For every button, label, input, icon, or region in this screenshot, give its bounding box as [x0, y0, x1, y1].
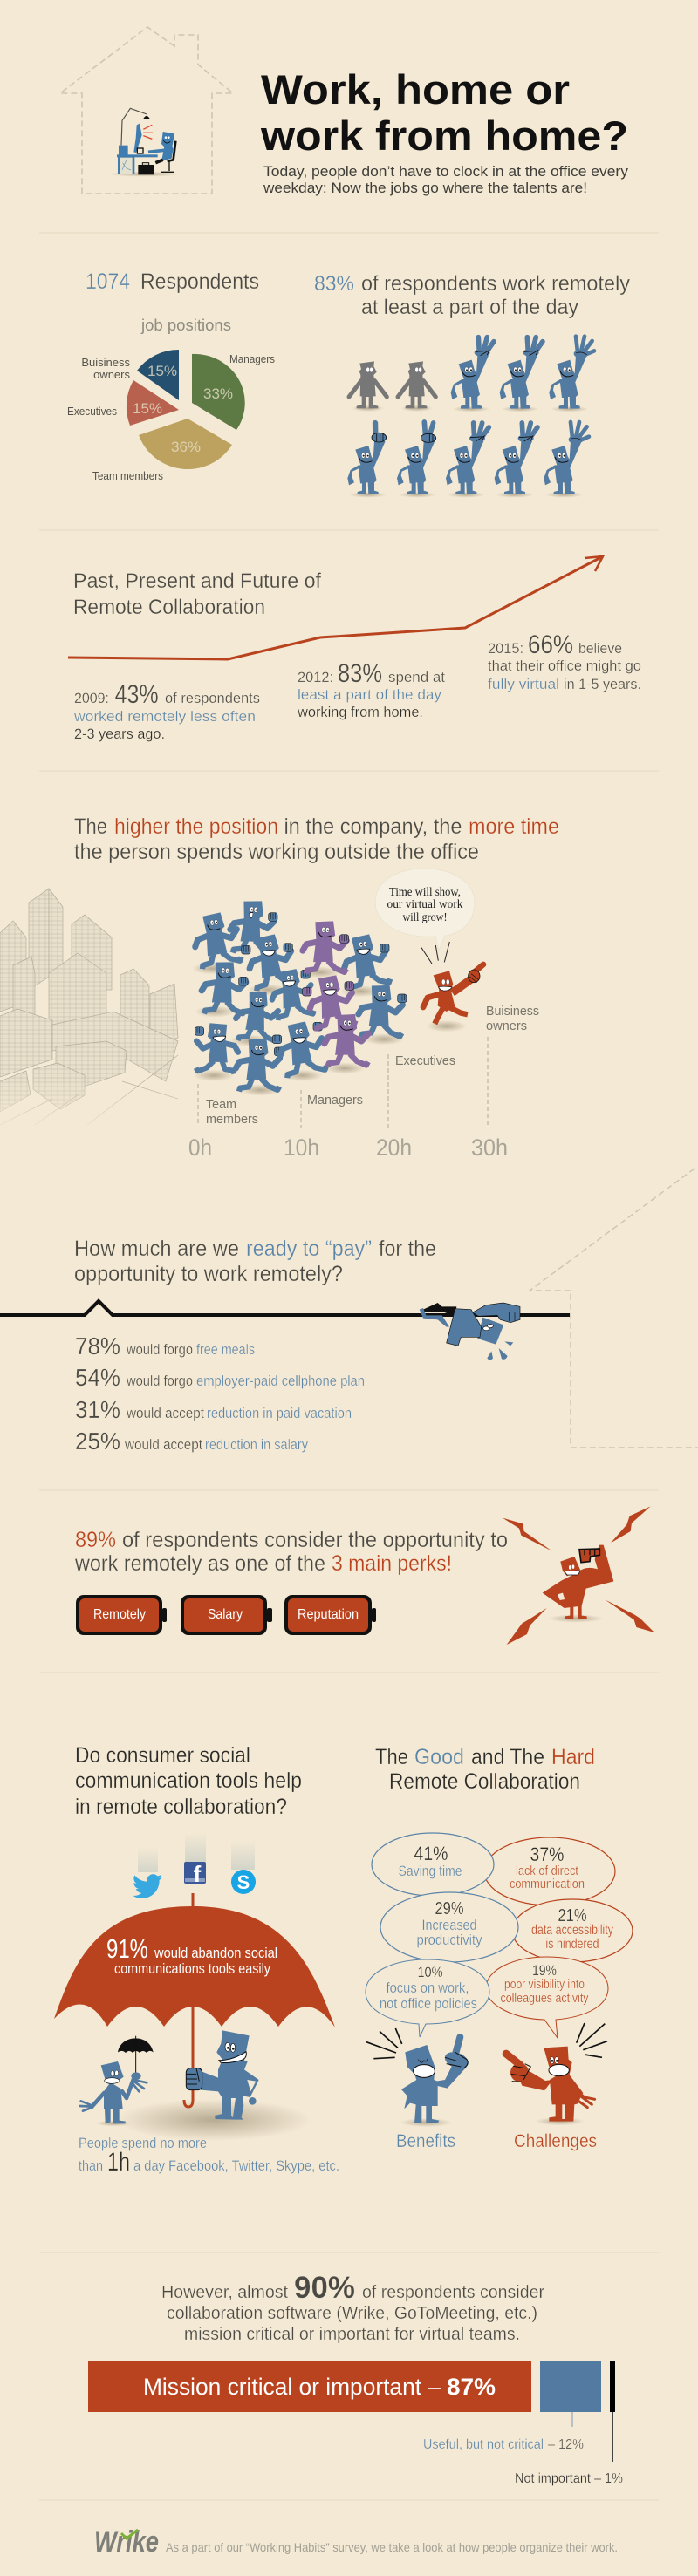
speech bubble: will grow!	[403, 910, 447, 923]
bubble: 19%	[486, 1957, 608, 2038]
good and hard heading	[375, 1745, 595, 1794]
timeline heading: Past, Present and Future of	[73, 569, 321, 593]
callout: 2012	[297, 659, 445, 720]
pay stats: would accept	[124, 1436, 202, 1453]
bubble: 41%	[372, 1833, 494, 1896]
pay heading: ready to “pay”	[246, 1237, 372, 1261]
red runner pointing	[421, 942, 483, 1024]
software paragraph: of respondents consider	[362, 2283, 544, 2302]
battery: Reputation	[284, 1595, 376, 1635]
bubble: 21%: is hindered	[546, 1937, 599, 1952]
callout: 2012: working from home.	[297, 704, 423, 720]
illustration: sketched city	[0, 889, 178, 1125]
callout: 2012: 83%	[338, 659, 382, 688]
software paragraph: 90%	[294, 2271, 355, 2305]
icon: facebook	[184, 1861, 206, 1887]
city fade	[0, 1077, 183, 1138]
umbrella: 91%	[106, 1933, 148, 1964]
battery: Reputation: Reputation	[298, 1607, 359, 1622]
social tools heading: Do consumer social	[75, 1743, 250, 1768]
software paragraph: However, almost	[161, 2283, 288, 2302]
good and hard heading: Hard	[551, 1745, 595, 1769]
labels: benefits and challenges: Benefits	[396, 2131, 455, 2151]
callout: 2009: 43%	[115, 680, 159, 709]
speech bubble: our virtual work	[387, 897, 463, 910]
usage note	[79, 2135, 339, 2177]
strong figure with lightning	[503, 1506, 654, 1645]
callout: 2015: in 1-5 years.	[564, 676, 641, 692]
title: work from home?	[260, 112, 628, 159]
stacked bar	[88, 2361, 615, 2412]
figure: benefits	[366, 2028, 470, 2127]
bubble: 10%: not office policies	[380, 1995, 477, 2012]
callout: 2015: fully virtual	[488, 676, 559, 692]
battery: Remotely	[76, 1595, 167, 1635]
position heading: more time	[469, 814, 559, 839]
callout: 2009: 2-3 years ago.	[74, 726, 165, 742]
good and hard heading: The	[375, 1745, 408, 1769]
chart labels: members	[206, 1112, 258, 1127]
good and hard heading: and The	[471, 1745, 544, 1769]
respondents heading	[86, 269, 259, 294]
chart labels: owners	[486, 1019, 527, 1033]
pie chart: job positions: 15%	[133, 400, 162, 417]
umbrella: communications tools easily	[114, 1960, 270, 1977]
social tools heading: in remote collaboration?	[75, 1795, 287, 1819]
bubble: 21%: data accessibility	[531, 1923, 613, 1938]
bubble: 41%: Saving time	[398, 1863, 462, 1879]
icon: facebook: f	[194, 1861, 202, 1887]
dividers	[39, 233, 659, 2500]
bubble: 10%: 10%	[417, 1964, 443, 1980]
perks heading: work remotely as one of the	[74, 1551, 325, 1576]
chart tick lines	[198, 1037, 488, 1128]
battery: Remotely: Remotely	[93, 1607, 146, 1622]
arrow: trend line	[68, 556, 603, 659]
pay heading: for the	[379, 1237, 436, 1261]
remote share heading: 83%	[314, 272, 354, 296]
chart labels: Executives	[395, 1053, 455, 1068]
pay heading: How much are we	[74, 1237, 239, 1261]
hours axis: 20h	[376, 1135, 412, 1161]
chart labels: Team	[206, 1097, 236, 1112]
pay stats: reduction in paid vacation	[207, 1405, 352, 1421]
remote share heading: at least a part of the day	[361, 296, 578, 319]
position heading: The	[74, 814, 107, 839]
pictogram: 10 people, 8 raising hands	[347, 337, 594, 498]
perks heading	[74, 1528, 508, 1576]
pie subtitle: job positions	[140, 317, 231, 334]
pay stats: would accept	[126, 1405, 204, 1421]
pay stats: free meals	[196, 1341, 255, 1358]
perks heading: 89%	[75, 1528, 116, 1552]
subtitle	[263, 163, 629, 196]
pie chart: job positions: 33%	[203, 385, 233, 402]
speech bubble	[375, 869, 475, 951]
callout: 2009: worked remotely less often	[73, 708, 256, 725]
title: Work, home or	[261, 66, 570, 112]
pay stats: 54%	[75, 1364, 120, 1391]
position heading	[74, 814, 559, 864]
subtitle: weekday: Now the jobs go where the talents are!	[263, 180, 587, 196]
figure hanging from bar	[420, 1303, 520, 1360]
labels: benefits and challenges: Challenges	[514, 2131, 597, 2151]
pay stats: 78%	[75, 1332, 120, 1360]
callout: 2012: 2012:	[298, 669, 333, 685]
pay stats: 25%	[75, 1428, 120, 1455]
bubble: 21%	[512, 1899, 633, 1962]
usage note: a day Facebook, Twitter, Skype, etc.	[133, 2157, 339, 2174]
stacked bar: Mission critical or important –	[143, 2374, 441, 2400]
bubble: 21%: 21%	[558, 1906, 587, 1925]
position heading: the person spends working outside the office	[74, 840, 479, 864]
remote share heading: of respondents work remotely	[361, 272, 630, 296]
bar leaders	[571, 2412, 573, 2427]
social tools heading: communication tools help	[75, 1768, 302, 1793]
callout: 2009: 2009:	[74, 690, 109, 706]
hours axis: 0h	[188, 1135, 212, 1161]
pay heading: opportunity to work remotely?	[74, 1262, 343, 1286]
bar labels: Not important – 1%	[515, 2471, 623, 2486]
perks heading: of respondents consider the opportunity to	[122, 1528, 508, 1552]
battery: Salary	[181, 1595, 272, 1635]
good and hard heading: Remote Collaboration	[389, 1769, 580, 1794]
pie labels: Managers	[229, 352, 275, 365]
bubble: 19%: poor visibility into	[504, 1977, 585, 1992]
hours axis: 30h	[471, 1135, 508, 1161]
icon trails	[138, 1833, 255, 1872]
respondents heading: 1074	[86, 269, 130, 294]
pay stats: reduction in salary	[205, 1436, 308, 1453]
software paragraph: mission critical or important for virtual teams.	[184, 2325, 520, 2344]
timeline heading: Remote Collaboration	[73, 596, 265, 619]
chart labels: Buisiness	[486, 1004, 539, 1019]
umbrella: would abandon social	[154, 1945, 277, 1961]
callout: 2012: spend at	[388, 669, 445, 685]
pay stats	[75, 1332, 365, 1455]
grey figures	[349, 361, 387, 408]
icon: person at desk	[107, 108, 181, 177]
icon: skype: S	[237, 1871, 250, 1893]
bar with bump	[0, 1301, 570, 1315]
pie labels: Executives	[67, 405, 117, 418]
bubble: 29%: productivity	[417, 1932, 482, 1948]
pay heading	[74, 1237, 436, 1286]
usage note: People spend no more	[79, 2135, 207, 2151]
bubble: 41%: 41%	[414, 1843, 448, 1864]
crowd of runners	[191, 899, 467, 1096]
pie chart: job positions	[127, 350, 245, 469]
bubble: 29%	[380, 1892, 518, 1962]
logo: Wrike: Wrike	[94, 2525, 159, 2559]
speech bubble: Time will show,	[389, 885, 461, 898]
bubble: 10%: focus on work,	[386, 1980, 469, 1996]
bubble: 19%: 19%	[532, 1962, 557, 1979]
blue figures	[347, 337, 594, 494]
pie chart: job positions: 15%	[147, 363, 177, 379]
usage note: 1h	[107, 2148, 130, 2177]
house outline	[60, 27, 233, 194]
battery: Salary: Salary	[208, 1607, 243, 1622]
good and hard heading: Good	[414, 1745, 464, 1769]
callout: 2009	[73, 680, 260, 742]
callout: 2015: 2015:	[488, 640, 524, 657]
bubble: 29%: Increased	[422, 1917, 476, 1933]
pie labels: owners	[93, 368, 130, 381]
callout: 2015: that their office might go	[488, 658, 641, 674]
position heading: higher the position	[114, 814, 278, 839]
icon: skype	[231, 1870, 256, 1894]
callout: 2009: of respondents	[165, 690, 260, 706]
stacked bar: 87%	[447, 2374, 496, 2400]
pay stats: 31%	[75, 1396, 120, 1423]
bubble: 37%: 37%	[530, 1843, 564, 1865]
hours axis	[188, 1135, 508, 1161]
callout: 2012: least a part of the day	[298, 686, 441, 703]
bar labels: Useful, but not critical	[423, 2437, 544, 2452]
software paragraph: collaboration software (Wrike, GoToMeeting, etc.)	[167, 2304, 537, 2323]
perks heading: 3 main perks!	[332, 1551, 452, 1576]
pie labels	[67, 352, 275, 482]
bubble: 19%: colleagues activity	[501, 1991, 589, 2006]
bubble: 37%: lack of direct	[516, 1864, 579, 1878]
usage note: than	[79, 2157, 103, 2174]
chart labels: Managers	[307, 1093, 363, 1107]
labels: benefits and challenges	[396, 2131, 597, 2151]
figures under umbrellas	[80, 2030, 259, 2126]
respondents heading: Respondents	[140, 269, 259, 294]
pay stats: would forgo	[126, 1341, 193, 1358]
icon: twitter	[133, 1874, 162, 1898]
pie labels: Team members	[92, 469, 163, 482]
footer tagline: As a part of our “Working Habits” survey, we take a look at how people organize their work.	[166, 2540, 618, 2554]
title	[260, 66, 628, 159]
callout: 2015: 66%	[528, 630, 573, 659]
bar labels: – 12%	[548, 2437, 584, 2452]
umbrella	[54, 1893, 335, 2141]
bubble: 10%	[366, 1959, 489, 2037]
pie labels: Buisiness	[81, 356, 130, 369]
subtitle: Today, people don’t have to clock in at the office every	[263, 163, 629, 180]
remote share heading	[314, 272, 630, 319]
callout: 2015: believe	[578, 640, 622, 657]
position heading: in the company, the	[284, 814, 462, 839]
figure: challenges	[506, 2023, 607, 2125]
second house outline	[530, 1169, 698, 1448]
bubble: 37%: communication	[510, 1877, 585, 1891]
pay stats: would forgo	[126, 1373, 193, 1389]
pie chart: job positions: 36%	[171, 439, 201, 455]
timeline heading	[73, 569, 321, 619]
callout: 2015	[488, 630, 641, 692]
chart labels	[206, 1004, 539, 1127]
social tools heading	[75, 1743, 302, 1819]
bubble: 37%	[484, 1837, 615, 1905]
bar labels	[423, 2437, 623, 2486]
bubble: 29%: 29%	[435, 1899, 464, 1918]
software paragraph	[161, 2271, 544, 2344]
pay stats: employer-paid cellphone plan	[196, 1373, 365, 1389]
hours axis: 10h	[284, 1135, 319, 1161]
